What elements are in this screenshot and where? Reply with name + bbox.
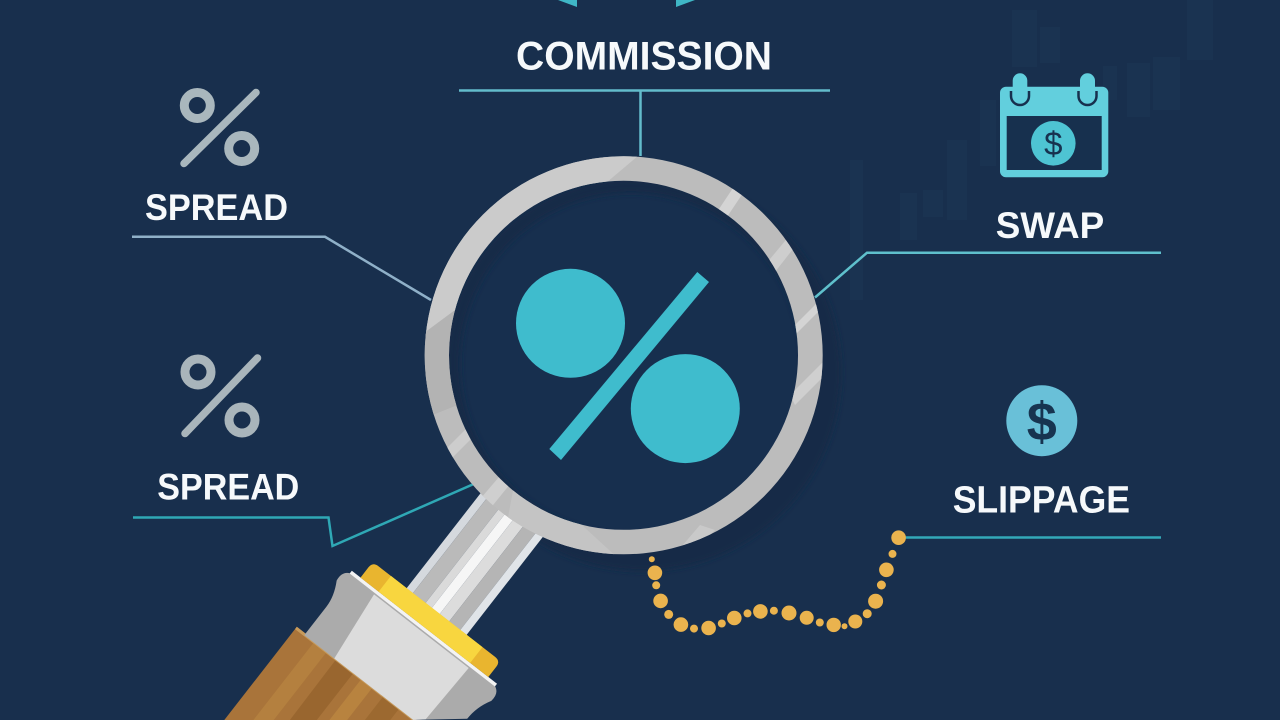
handle wood grip <box>224 627 417 720</box>
slippage connector <box>903 536 1161 539</box>
commission label: COMMISSION <box>516 34 772 78</box>
icon: spread percent upper <box>184 92 256 164</box>
spread connector upper <box>132 237 431 300</box>
lens percent symbol <box>516 269 740 463</box>
icon: slippage dollar coin: $ <box>1027 392 1057 452</box>
spread label upper: SPREAD <box>145 187 288 228</box>
magnifying glass handle <box>224 469 559 720</box>
slippage label: SLIPPAGE <box>953 480 1130 522</box>
icon: swap calendar <box>1000 73 1108 177</box>
swap label: SWAP <box>996 205 1104 246</box>
magnifying glass lens <box>420 150 830 562</box>
lens ring <box>420 150 830 562</box>
spread connector lower <box>133 483 476 546</box>
icon: slippage dollar coin <box>1006 385 1077 456</box>
handle shaft <box>404 469 559 638</box>
icon: swap calendar: $ <box>1044 125 1062 162</box>
slippage dotted path <box>648 530 906 635</box>
handle gold collar <box>360 564 498 677</box>
top arrow fragments <box>558 0 695 7</box>
swap connector <box>815 253 1161 298</box>
commission connector <box>459 90 830 156</box>
lens drop shadow <box>443 173 841 571</box>
icon: spread percent lower <box>185 358 258 434</box>
spread label lower: SPREAD <box>157 466 299 507</box>
handle silver ferrule <box>304 571 497 720</box>
